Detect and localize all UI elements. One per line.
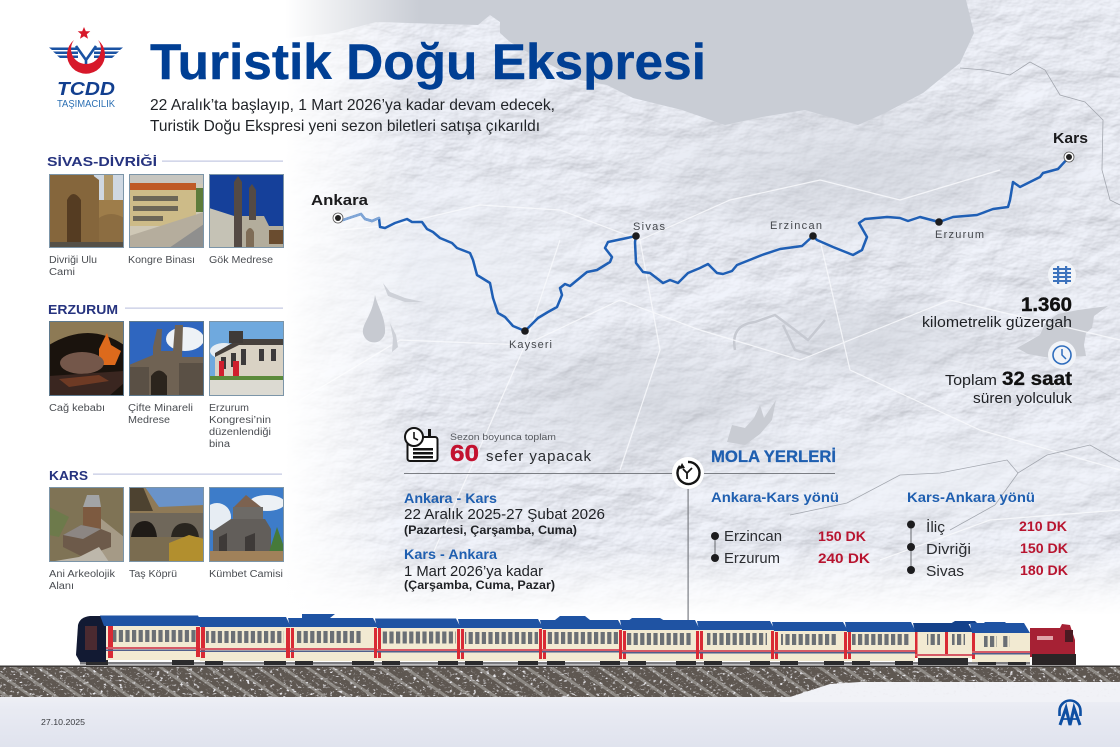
list: Kars-Ankara stops: 210 DK	[1019, 518, 1067, 534]
logo subtext: TAŞIMACILIK	[57, 99, 115, 110]
captions	[49, 569, 283, 592]
car 5	[458, 619, 543, 661]
photo: Kongre Binası	[129, 174, 204, 248]
photo: Ani Arkeolojik Alanı	[49, 487, 124, 562]
roads	[300, 170, 1120, 560]
heading: Kars: KARS	[49, 469, 88, 483]
captions: düzenlendiği	[209, 427, 271, 438]
city labels: Ankara	[311, 192, 369, 209]
car 12	[970, 622, 1030, 662]
subtitle: 22 Aralık’ta başlayıp, 1 Mart 2026’ya kadar devam edecek,	[150, 97, 555, 114]
panel: schedule: 60	[450, 440, 479, 466]
list: Kars-Ankara stops: 150 DK	[1020, 540, 1068, 556]
stat: route length	[922, 261, 1076, 331]
panel: schedule: Sezon boyunca toplam	[450, 432, 556, 443]
car 4	[375, 618, 461, 661]
icon: timeline clock	[672, 457, 704, 622]
panel: Erzurum	[48, 303, 284, 450]
reservoirs	[734, 315, 825, 355]
stat: travel time: Toplam	[945, 372, 997, 389]
captions: Medrese	[128, 415, 170, 426]
captions: Çifte Minareli	[128, 403, 193, 414]
photo: Kümbet Camisi	[209, 487, 284, 562]
ground: snow and embankment	[0, 666, 1120, 747]
city labels: Kars	[1053, 130, 1088, 147]
captions: Kongresi’nin	[209, 415, 271, 426]
photo: Gök Medrese	[209, 174, 284, 248]
underframe and bogies	[80, 658, 1030, 665]
panel: schedule: (Pazartesi, Çarşamba, Cuma)	[404, 525, 577, 537]
panel: schedule: 1 Mart 2026’ya kadar	[404, 564, 543, 580]
sea: Black Sea	[200, 0, 974, 125]
captions	[49, 403, 271, 450]
logo wordmark: TCDD	[57, 79, 115, 99]
captions: Taş Köprü	[129, 569, 177, 580]
photo: Erzurum Kongresi binası	[209, 321, 284, 396]
lake: Tuz	[363, 295, 385, 342]
city labels: Erzurum	[935, 229, 984, 241]
panel: rest stops	[704, 447, 1068, 580]
lake: Van	[1017, 306, 1108, 358]
captions: Gök Medrese	[209, 255, 273, 266]
captions: Cağ kebabı	[49, 403, 105, 414]
list: Kars-Ankara stops: 180 DK	[1020, 562, 1068, 578]
panel: schedule	[404, 428, 672, 592]
title: Turistik Doğu Ekspresi	[150, 34, 706, 90]
rear car end	[76, 616, 106, 662]
list: Kars-Ankara stops: Divriği	[926, 542, 971, 558]
icon: rail track	[1048, 261, 1076, 289]
panel: schedule: 22 Aralık 2025-27 Şubat 2026	[404, 507, 605, 523]
borders	[790, 62, 1120, 530]
list: Ankara-Kars stops: Erzincan	[724, 529, 782, 545]
list: Ankara-Kars stops	[711, 528, 870, 567]
car 10	[845, 622, 916, 661]
panel: Sivas-Divriği	[47, 154, 284, 278]
car 1	[100, 616, 203, 660]
logo: TCDD Taşımacılık	[49, 27, 123, 110]
captions: Erzurum	[209, 403, 249, 414]
map markers	[333, 152, 1074, 335]
city labels	[311, 130, 1088, 351]
car 7	[620, 618, 700, 661]
captions: Kümbet Camisi	[209, 569, 283, 580]
white fade left	[0, 0, 420, 747]
captions: bina	[209, 439, 230, 450]
photo: Çifte Minareli Medrese	[129, 321, 204, 396]
list: Kars-Ankara stops: İliç	[926, 518, 945, 536]
white fade bottom	[0, 545, 1120, 615]
car 8	[697, 621, 775, 661]
icon: calendar with clock	[405, 428, 438, 461]
photo: Taş Köprü	[129, 487, 204, 562]
heading: Sivas-Divriği: SİVAS-DİVRİĞİ	[47, 154, 157, 169]
captions: Divriği Ulu	[49, 255, 97, 266]
list: Ankara-Kars stops: 150 DK	[818, 528, 866, 544]
panel: schedule: (Çarşamba, Cuma, Pazar)	[404, 580, 555, 592]
lake: Keban reservoir	[727, 400, 776, 445]
city labels: Kayseri	[509, 339, 552, 351]
stat: route length: 1.360	[1021, 294, 1072, 316]
logo: AA	[1060, 700, 1080, 725]
car 3	[288, 614, 378, 661]
city labels: Erzincan	[770, 220, 822, 232]
list: Kars-Ankara stops: Sivas	[926, 564, 964, 580]
photo: Cağ kebabı	[49, 321, 124, 396]
stat: travel time: süren yolculuk	[973, 390, 1073, 407]
panel: schedule: sefer yapacak	[486, 448, 592, 465]
heading: Erzurum: ERZURUM	[48, 303, 118, 317]
car 11	[913, 621, 978, 658]
icon: clock	[1048, 341, 1076, 369]
lake: small reservoirs near Ankara	[383, 283, 423, 352]
list: Ankara-Kars stops: 240 DK	[818, 550, 870, 566]
stat: travel time	[945, 341, 1076, 407]
photo: Divriği Ulu Cami	[49, 174, 124, 248]
city labels: Sivas	[633, 221, 666, 233]
subtitle: Turistik Doğu Ekspresi yeni sezon biletleri satışa çıkarıldı	[150, 118, 540, 135]
car 2	[198, 617, 291, 661]
stat: travel time: 32 saat	[1002, 369, 1073, 390]
route line	[343, 157, 1069, 331]
captions: Alanı	[49, 581, 74, 592]
captions: Ani Arkeolojik	[49, 569, 116, 580]
captions	[49, 255, 273, 278]
car 9	[772, 622, 848, 661]
panel: schedule: Ankara - Kars	[404, 490, 497, 506]
car 6	[540, 616, 623, 661]
list: Kars-Ankara stops	[907, 518, 1068, 580]
captions: Kongre Binası	[128, 255, 195, 266]
list: Ankara-Kars stops: Erzurum	[724, 551, 780, 567]
subtitle	[150, 97, 555, 135]
locomotive	[1030, 624, 1076, 665]
captions: Cami	[49, 267, 75, 278]
panel: rest stops: Kars-Ankara yönü	[907, 490, 1035, 505]
stat: route length: kilometrelik güzergah	[922, 314, 1072, 331]
panel: rest stops: Ankara-Kars yönü	[711, 490, 839, 505]
panel: Kars	[49, 469, 285, 592]
panel: rest stops: MOLA YERLERİ	[711, 447, 836, 466]
panel: schedule: Kars - Ankara	[404, 546, 497, 562]
date: 27.10.2025	[41, 717, 85, 727]
train	[76, 614, 1076, 665]
